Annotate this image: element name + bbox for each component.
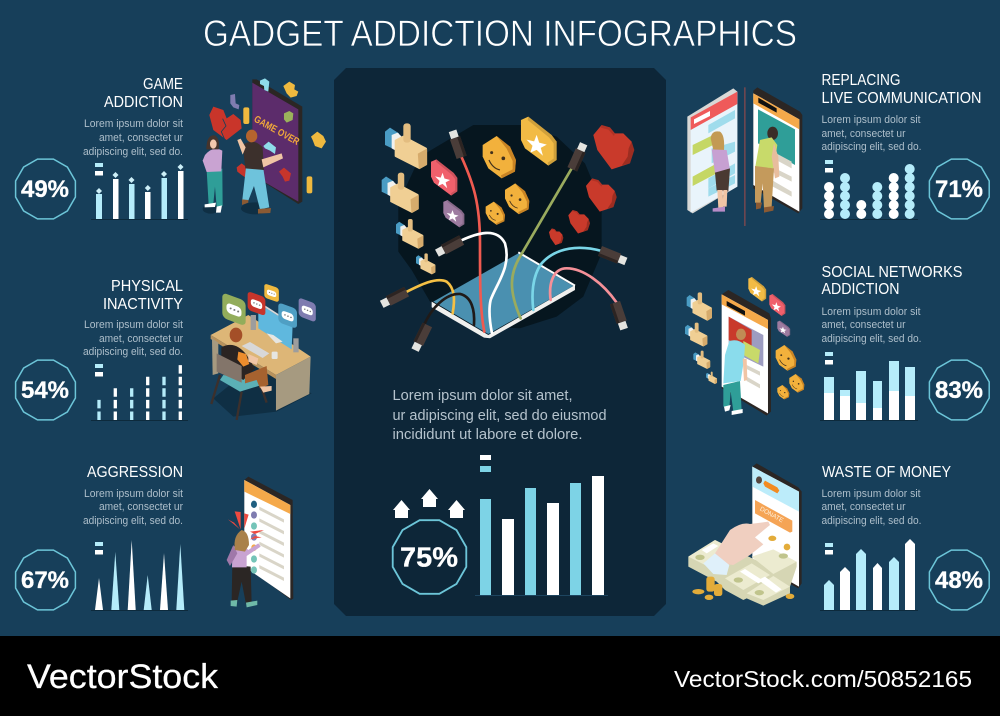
- panel: replacing live communication: [687, 72, 989, 226]
- heading: social networks addiction: [822, 264, 962, 298]
- title: GADGET ADDICTION INFOGRAPHICS: [203, 13, 797, 54]
- text block: aggression: amet, consectet ur: [99, 501, 183, 513]
- bar chart: center: [475, 455, 608, 596]
- panel: center: [334, 68, 666, 616]
- percentage: 75%: 75%: [400, 542, 458, 572]
- left phone: [687, 88, 737, 213]
- text block: physical inactivity: [83, 319, 183, 358]
- image id link: VectorStock.com/50852165: [674, 666, 972, 692]
- icons: star badges: [431, 117, 557, 227]
- text block: center: Lorem ipsum dolor sit amet,: [392, 388, 572, 404]
- illustration: social phone: [685, 277, 804, 416]
- panel: aggression: [16, 464, 293, 611]
- text block: physical inactivity: Lorem ipsum dolor sit: [84, 319, 183, 331]
- percentage: 67%: 67%: [21, 567, 69, 594]
- text block: replacing: Lorem ipsum dolor sit: [822, 114, 920, 126]
- heading: waste of money: WASTE OF MONEY: [822, 464, 951, 481]
- heading: game addiction: [104, 76, 183, 111]
- percentage: 48%: [929, 550, 989, 610]
- heading: replacing live communication: REPLACING: [822, 72, 900, 89]
- text block: waste of money: adipiscing elit, sed do.: [822, 515, 922, 527]
- heading: aggression: AGGRESSION: [87, 464, 183, 481]
- percentage: 83%: [929, 360, 989, 420]
- text block: replacing: adipiscing elit, sed do.: [822, 141, 922, 153]
- icons: tetris blocks: [230, 78, 326, 193]
- heading: replacing live communication: [822, 72, 982, 107]
- text block: replacing: amet, consectet ur: [822, 128, 906, 140]
- text block: social networks: amet, consectet ur: [822, 319, 906, 331]
- chat bubbles: [222, 283, 316, 329]
- cables: [405, 157, 617, 333]
- illustration: donate phone and money: [688, 463, 802, 606]
- heading: social networks addiction: ADDICTION: [822, 281, 900, 298]
- illustration: man at desk: [211, 283, 316, 420]
- percentage: 71%: [929, 159, 989, 219]
- percentage: 54%: [16, 360, 75, 420]
- text block: waste of money: Lorem ipsum dolor sit: [822, 488, 920, 500]
- icons: thumbs up: [382, 123, 435, 274]
- panel: game addiction: [16, 76, 326, 220]
- heading: physical inactivity: [103, 278, 183, 313]
- percentage: 48%: 48%: [935, 567, 983, 594]
- icon: anger spikes: [228, 511, 264, 539]
- money stacks: [688, 540, 797, 606]
- text block: center: [392, 388, 606, 443]
- logo: VectorStock: VectorStock: [27, 658, 219, 696]
- percentage: 67%: [16, 550, 75, 610]
- illustration: game over phone: GAME OVER: [252, 114, 301, 148]
- heading: physical inactivity: INACTIVITY: [103, 296, 183, 313]
- spike chart: aggression: [91, 540, 188, 611]
- hand: [703, 522, 770, 575]
- illustration: two phones and people: [687, 87, 802, 226]
- footer bar: [0, 636, 1000, 716]
- text block: game addiction: [83, 118, 183, 158]
- man: [755, 127, 779, 213]
- text block: waste of money: amet, consectet ur: [822, 501, 906, 513]
- arrow bar chart: waste of money: [820, 539, 918, 611]
- monitor: [242, 303, 299, 359]
- stacked bar chart: social networks: [820, 352, 918, 421]
- figure: woman: [227, 530, 261, 607]
- text block: social networks: [822, 306, 922, 345]
- tablet: [432, 252, 575, 338]
- illustration: woman at phone: [227, 477, 293, 607]
- text block: social networks: Lorem ipsum dolor sit: [822, 306, 920, 318]
- heading: game addiction: ADDICTION: [104, 94, 183, 111]
- arrows up: [393, 489, 465, 518]
- panel: social networks addiction: [685, 264, 989, 421]
- icon: broken heart: [209, 107, 242, 140]
- text block: game addiction: adipiscing elit, sed do.: [83, 146, 183, 158]
- text block: center: incididunt ut labore et dolore.: [392, 427, 582, 443]
- man: [723, 329, 747, 415]
- panel: physical inactivity: [16, 278, 316, 421]
- text block: aggression: [83, 488, 183, 527]
- icons: smileys: [483, 136, 529, 225]
- icons: reactions: [685, 277, 804, 399]
- percentage: 54%: 54%: [21, 377, 69, 404]
- right phone: [753, 87, 802, 213]
- bar chart: physical inactivity: [91, 364, 188, 421]
- illustration: cables and reactions: [379, 117, 634, 352]
- text block: physical inactivity: adipiscing elit, sed do.: [83, 346, 183, 358]
- text block: aggression: Lorem ipsum dolor sit: [84, 488, 183, 500]
- percentage: 75%: [393, 520, 466, 594]
- plugs: [379, 129, 629, 352]
- percentage: 83%: 83%: [935, 377, 983, 404]
- icons: hearts: [549, 125, 634, 245]
- heading: social networks addiction: SOCIAL NETWORKS: [822, 264, 962, 281]
- text block: aggression: adipiscing elit, sed do.: [83, 515, 183, 527]
- text block: physical inactivity: amet, consectet ur: [99, 333, 183, 345]
- chair and man: [211, 328, 272, 420]
- dot chart: replacing: [820, 160, 918, 220]
- desk: [211, 315, 311, 411]
- text block: social networks: adipiscing elit, sed do.: [822, 333, 922, 345]
- percentage: 49%: 49%: [21, 176, 69, 203]
- woman: [711, 131, 730, 212]
- illustration: donate phone and money: DONATE: [758, 506, 784, 524]
- heading: replacing live communication: LIVE COMMUNICATION: [822, 90, 982, 107]
- coins: [692, 536, 794, 600]
- divider: [744, 87, 746, 226]
- text block: game addiction: Lorem ipsum dolor sit: [84, 118, 183, 130]
- text block: waste of money: [822, 488, 922, 527]
- figure: man: [237, 130, 283, 214]
- percentage: 49%: [16, 159, 75, 219]
- heading: physical inactivity: PHYSICAL: [111, 278, 183, 295]
- figure: woman: [203, 135, 223, 214]
- bar chart: game addiction: [91, 163, 188, 220]
- panel: waste of money: [688, 463, 989, 611]
- illustration: game over phone: [203, 78, 326, 214]
- text block: game addiction: amet, consectet ur: [99, 132, 183, 144]
- text block: center: ur adipiscing elit, sed do eiusmod: [392, 408, 606, 424]
- panel background: [334, 68, 666, 616]
- text block: replacing: [822, 114, 922, 153]
- percentage: 71%: 71%: [935, 176, 983, 203]
- heading: game addiction: GAME: [143, 76, 183, 93]
